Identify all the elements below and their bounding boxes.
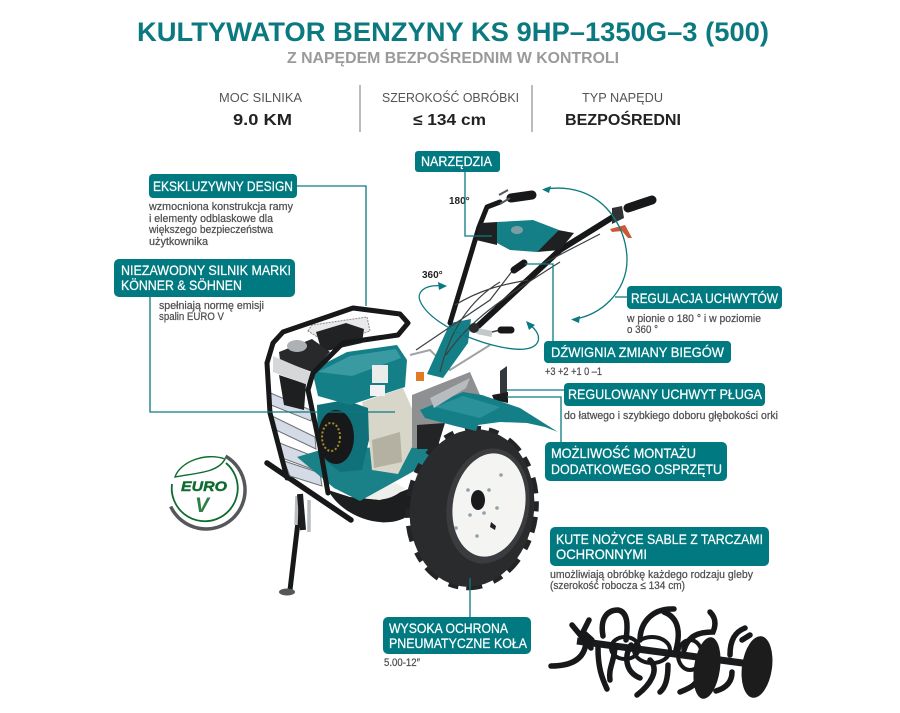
icon: Euro V badge: EURO xyxy=(181,478,227,494)
plow upright xyxy=(500,366,507,397)
callout: sable blades: OCHRONNYMI xyxy=(556,546,647,562)
recoil starter xyxy=(318,410,354,464)
callout: exclusive design xyxy=(148,174,297,248)
callout: handle adjustment: w pionie o 180 ° i w poziomie xyxy=(626,313,761,325)
fuel tank xyxy=(312,345,407,405)
subtitle: Z NAPĘDEM BEZPOŚREDNIM W KONTROLI xyxy=(287,49,619,67)
callout: reliable engine xyxy=(114,259,295,323)
fender xyxy=(420,392,558,432)
spec: engine power xyxy=(219,91,303,129)
spec: engine power: 9.0 KM xyxy=(233,112,292,129)
callout: gear lever: DŹWIGNIA ZMIANY BIEGÓW xyxy=(551,344,725,360)
callout: pneumatic wheels: 5.00-12″ xyxy=(384,657,420,669)
right handle xyxy=(477,200,652,327)
callout: sable blades: KUTE NOŻYCE SABLE Z TARCZAMI xyxy=(556,530,763,547)
callout: pneumatic wheels: PNEUMATYCZNE KOŁA xyxy=(389,635,528,651)
plow adjuster handle xyxy=(469,323,511,334)
callout lines xyxy=(150,172,627,617)
callout: exclusive design: większego bezpieczeństwa xyxy=(148,224,274,236)
callout: gear lever xyxy=(544,341,731,378)
icon: Euro V badge xyxy=(171,456,245,529)
linkage xyxy=(410,345,490,370)
spec: working width: ≤ 134 cm xyxy=(413,112,486,129)
rear frame xyxy=(267,363,287,478)
rear wheel xyxy=(328,486,416,522)
callout: handle adjustment xyxy=(626,286,782,336)
spec: drive type xyxy=(565,91,681,129)
callout: reliable engine: KÖNNER & SÖHNEN xyxy=(121,276,242,293)
teal handle column xyxy=(427,319,471,378)
spec: working width xyxy=(382,90,519,129)
callout: sable blades: (szerokość robocza ≤ 134 cm) xyxy=(550,580,685,592)
engine block xyxy=(362,388,414,474)
callout: plow holder: REGULOWANY UCHWYT PŁUGA xyxy=(568,386,763,402)
base plate xyxy=(297,447,434,501)
label 180 degrees: 180° xyxy=(449,196,470,207)
callout: extra attachments xyxy=(545,442,727,481)
label 360 degrees: 360° xyxy=(422,270,443,281)
wheel rim xyxy=(445,448,533,562)
callout: plow holder: do łatwego i szybkiego doboru głębokości orki xyxy=(564,410,778,422)
left handle xyxy=(450,190,532,323)
tiller blades xyxy=(551,609,776,701)
callout: exclusive design: wzmocniona konstrukcja ramy xyxy=(148,201,293,213)
callout: sable blades: umożliwiają obróbkę każdego rodzaju gleby xyxy=(550,569,753,581)
callout: plow holder xyxy=(564,383,778,422)
rotation arrow 180 xyxy=(542,186,627,323)
title: KULTYWATOR BENZYNY KS 9HP–1350G–3 (500) xyxy=(137,17,769,47)
fan housing xyxy=(317,400,369,472)
spec: drive type: BEZPOŚREDNI xyxy=(565,111,681,129)
spec: drive type: TYP NAPĘDU xyxy=(582,91,663,105)
gear lever xyxy=(514,263,524,270)
callout: handle adjustment: o 360 ° xyxy=(627,324,658,336)
main wheel tyre xyxy=(397,420,547,596)
wheel hub xyxy=(454,473,503,538)
callout: sable blades xyxy=(550,527,769,592)
rotation arrow 360 xyxy=(419,282,539,349)
callout: exclusive design: i elementy odblaskowe dla xyxy=(149,213,274,225)
air filter and console xyxy=(273,317,370,410)
protective disc xyxy=(738,634,776,700)
gearbox xyxy=(412,372,480,448)
protective disc xyxy=(690,635,724,701)
callout: handle adjustment: REGULACJA UCHWYTÓW xyxy=(631,290,779,306)
stand xyxy=(279,494,309,596)
callout: reliable engine: NIEZAWODNY SILNIK MARKI xyxy=(121,262,291,278)
callout: extra attachments: MOŻLIWOŚĆ MONTAŻU xyxy=(551,444,696,461)
bottom frame bar xyxy=(267,463,351,520)
callout: pneumatic wheels xyxy=(383,617,531,669)
reflective strips xyxy=(268,392,322,486)
callout: gear lever: +3 +2 +1 0 –1 xyxy=(545,366,602,378)
cultivator machine xyxy=(267,190,652,596)
callout: reliable engine: spełniają normę emisji xyxy=(159,300,264,312)
callout: tools: NARZĘDZIA xyxy=(421,153,493,169)
control box xyxy=(476,220,574,252)
callout: reliable engine: spalin EURO V xyxy=(159,311,225,323)
spec row xyxy=(219,85,681,132)
cables xyxy=(416,234,600,372)
callout: exclusive design: EKSKLUZYWNY DESIGN xyxy=(153,178,293,194)
roll bar xyxy=(267,308,408,493)
icon: Euro V badge: V xyxy=(195,494,211,517)
callout: exclusive design: użytkownika xyxy=(149,236,209,248)
handle bracket xyxy=(430,378,470,408)
callout: pneumatic wheels: WYSOKA OCHRONA xyxy=(389,620,509,636)
callout: extra attachments: DODATKOWEGO OSPRZĘTU xyxy=(551,461,722,477)
spec: engine power: MOC SILNIKA xyxy=(219,91,303,105)
spec: working width: SZEROKOŚĆ OBRÓBKI xyxy=(382,90,519,105)
